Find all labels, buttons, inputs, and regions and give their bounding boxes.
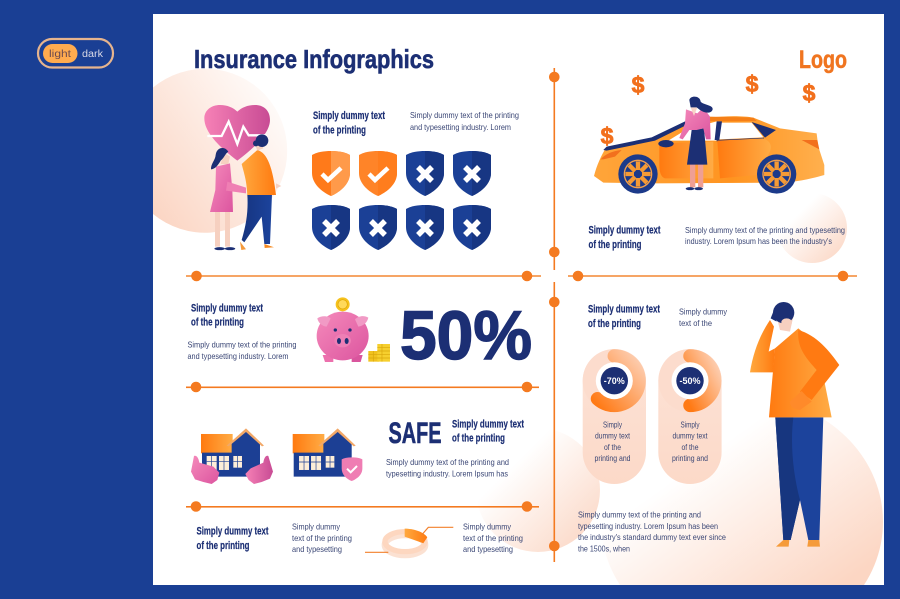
theme toggle: dark bbox=[82, 49, 104, 60]
text: bottom right: Simply dummy bbox=[463, 522, 512, 532]
heading: block 1 bbox=[313, 110, 385, 136]
text: savings block: Simply dummy text of the printing bbox=[188, 340, 297, 350]
capsule: -50%: -50% bbox=[679, 376, 701, 386]
text: bottom left bbox=[292, 522, 352, 554]
icon: heart bbox=[204, 105, 270, 161]
dollar icons: $ bbox=[803, 80, 816, 106]
capsule: -50%: Simply bbox=[680, 420, 700, 430]
text: bottom paragraph: typesetting industry. Lorem Ipsum has been bbox=[578, 521, 718, 531]
text: savings block: and typesetting industry. Lorem bbox=[188, 351, 288, 361]
text: bottom paragraph: Simply dummy text of the printing and bbox=[578, 510, 701, 520]
text: safe block bbox=[386, 457, 509, 478]
text: savings block bbox=[188, 340, 297, 361]
heading: car block: of the printing bbox=[588, 239, 642, 251]
wheels bbox=[618, 154, 658, 194]
text: car block: industry. Lorem Ipsum has been the industry's bbox=[685, 236, 832, 246]
capsule: -70%: printing and bbox=[594, 453, 631, 463]
heading: safe block: of the printing bbox=[452, 432, 505, 444]
illustration: couple and heart bbox=[204, 105, 281, 250]
text: safe block: typesetting industry. Lorem Ipsum has bbox=[386, 468, 508, 478]
ring chart with leader lines bbox=[365, 527, 453, 555]
man bbox=[240, 134, 281, 250]
stat: 50%: 50% bbox=[400, 297, 532, 374]
heading: car block: Simply dummy text bbox=[588, 224, 661, 236]
text: discount block bbox=[679, 306, 728, 328]
capsule: -70%: Simply bbox=[603, 420, 623, 430]
theme toggle: light bbox=[49, 49, 71, 60]
title: Insurance Infographics bbox=[194, 44, 434, 74]
white panel bbox=[153, 14, 884, 585]
dollar icons: $ bbox=[746, 71, 759, 97]
capsule: -50%: dummy text bbox=[672, 430, 708, 440]
illustration: insured house bbox=[293, 428, 362, 481]
illustration: house in hands bbox=[191, 428, 273, 484]
text: block 1 bbox=[410, 110, 519, 132]
heading: discount block: of the printing bbox=[588, 318, 641, 330]
heading: bottom block: of the printing bbox=[196, 540, 250, 552]
capsule: -50%: of the bbox=[682, 442, 699, 452]
heading: bottom block bbox=[196, 526, 269, 552]
heading: car block bbox=[588, 224, 661, 251]
woman bbox=[210, 148, 246, 250]
heading: discount block: Simply dummy text bbox=[588, 304, 660, 316]
text: bottom paragraph: the 1500s, when bbox=[578, 544, 630, 554]
dollar icons: $ bbox=[632, 72, 645, 98]
shield grid bbox=[312, 151, 491, 250]
illustration: thinking man bbox=[750, 302, 839, 547]
car body bbox=[594, 116, 824, 183]
heading: savings block bbox=[191, 302, 263, 328]
text: bottom paragraph: the industry's standard dummy text ever since bbox=[578, 532, 726, 542]
heading: block 1: Simply dummy text bbox=[313, 110, 385, 122]
text: car block: Simply dummy text of the printing and typesetting bbox=[685, 225, 845, 235]
heading: safe block bbox=[452, 418, 524, 444]
text: block 1: Simply dummy text of the printing bbox=[410, 110, 519, 120]
capsule: -50%: printing and bbox=[672, 453, 708, 463]
soft background circles bbox=[153, 69, 883, 585]
heading: block 1: of the printing bbox=[313, 124, 366, 136]
theme toggle bbox=[38, 39, 113, 68]
text: safe block: Simply dummy text of the printing and bbox=[386, 457, 509, 467]
capsule: -50% bbox=[658, 349, 722, 484]
capsule: -70%: of the bbox=[604, 442, 621, 452]
logo: Logo bbox=[799, 46, 847, 74]
text: block 1: and typesetting industry. Lorem bbox=[410, 122, 511, 132]
text: bottom paragraph bbox=[578, 510, 726, 554]
text: bottom left: text of the printing bbox=[292, 533, 352, 543]
doors bbox=[659, 142, 713, 178]
text: bottom left: Simply dummy bbox=[292, 522, 341, 532]
heading: discount block bbox=[588, 304, 660, 330]
capsule: -70%: -70% bbox=[604, 376, 625, 386]
text: bottom right: text of the printing bbox=[463, 533, 523, 543]
heading: bottom block: Simply dummy text bbox=[196, 526, 269, 538]
dollar icons: $ bbox=[601, 123, 614, 149]
text: discount block: text of the bbox=[679, 318, 712, 328]
label: SAFE: SAFE bbox=[388, 417, 442, 450]
windows bbox=[668, 121, 717, 141]
text: car block bbox=[685, 225, 845, 246]
capsule: -70% bbox=[583, 349, 646, 484]
text: discount block: Simply dummy bbox=[679, 306, 728, 316]
text: bottom right: and typesetting bbox=[463, 544, 513, 554]
illustration: piggy bank and coins bbox=[317, 297, 390, 362]
capsule: -70%: dummy text bbox=[595, 430, 630, 440]
text: bottom right bbox=[463, 522, 523, 554]
heading: safe block: Simply dummy text bbox=[452, 418, 524, 430]
illustration: car and woman bbox=[594, 97, 824, 194]
dollar icons bbox=[601, 71, 816, 149]
divider lines bbox=[186, 68, 857, 562]
heading: savings block: Simply dummy text bbox=[191, 302, 263, 314]
text: bottom left: and typesetting bbox=[292, 544, 342, 554]
woman bbox=[679, 97, 713, 190]
heading: savings block: of the printing bbox=[191, 316, 244, 328]
